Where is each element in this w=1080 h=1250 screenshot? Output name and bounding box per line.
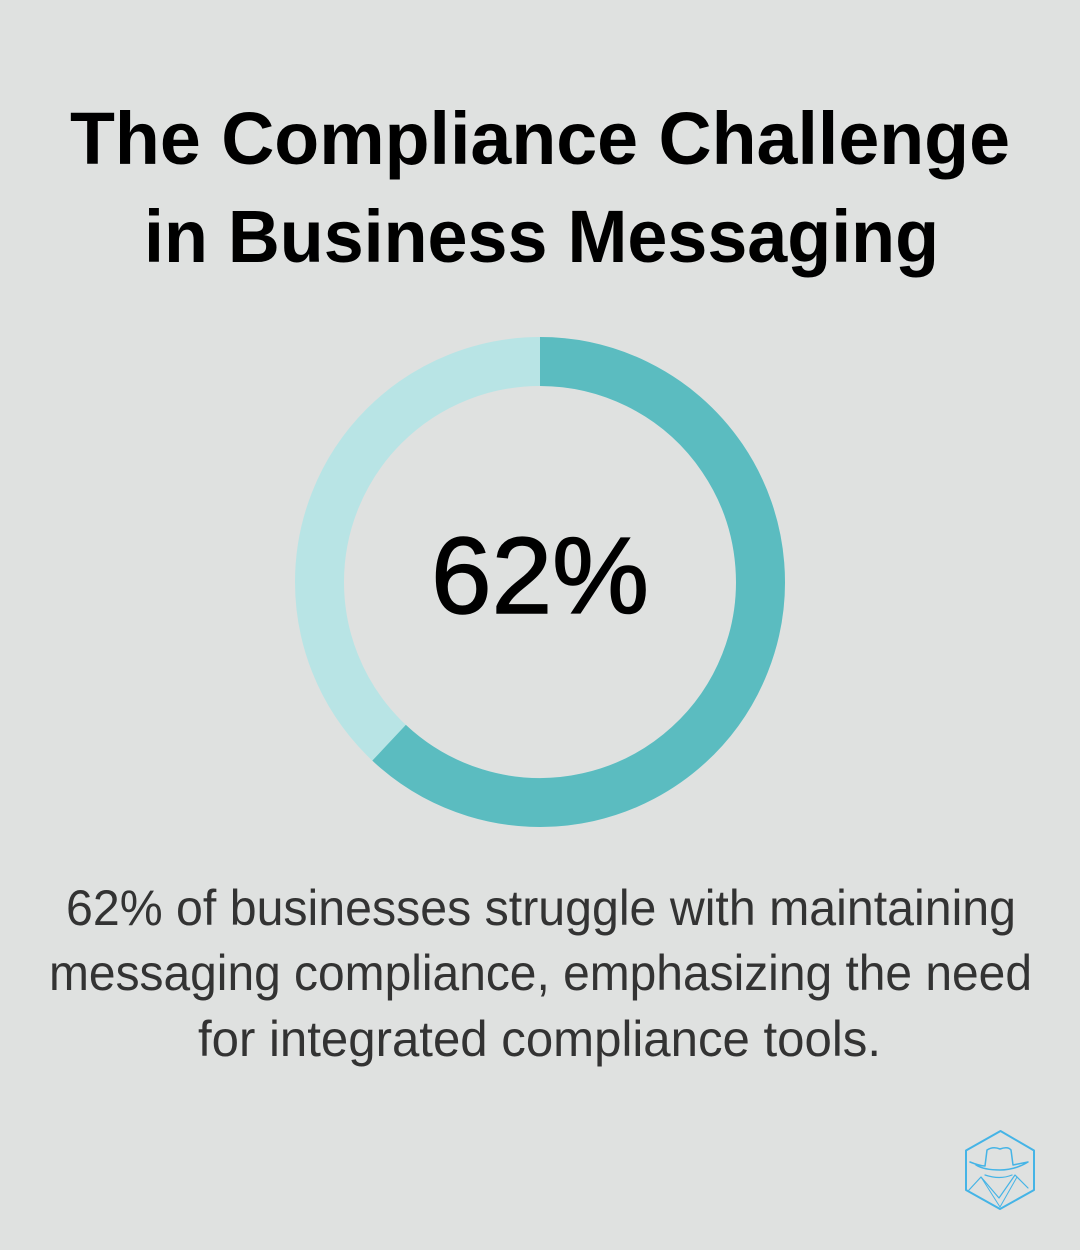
- donut value arc: [389, 362, 760, 802]
- donut center value: 62%: [431, 515, 649, 637]
- icon: hexagon logo with hat and coat: [966, 1131, 1034, 1209]
- donut track: [320, 362, 760, 802]
- donut chart: 62%: [320, 362, 760, 802]
- title: The Compliance Challenge: [70, 97, 1010, 180]
- description text: 62% of businesses struggle with maintaining: [66, 880, 1016, 936]
- coat collar: [969, 1175, 1028, 1198]
- title: in Business Messaging: [144, 195, 939, 278]
- description text: messaging compliance, emphasizing the need: [49, 945, 1032, 1001]
- description text: for integrated compliance tools.: [198, 1011, 881, 1067]
- title: [70, 97, 1010, 278]
- hat: [970, 1148, 1028, 1170]
- hexagon outline: [966, 1131, 1034, 1209]
- description text: [49, 880, 1032, 1067]
